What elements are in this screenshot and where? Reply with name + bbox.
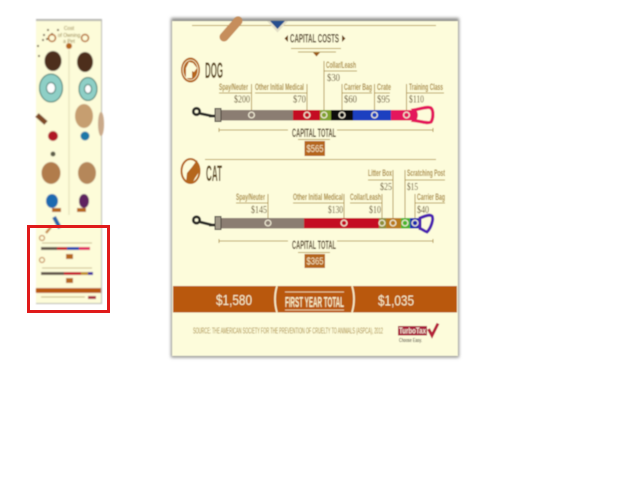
label: training class: Training Class: [409, 82, 443, 93]
label: carrier bag: [415, 192, 445, 218]
label: spay/neuter: Spay/Neuter: [219, 82, 248, 93]
label: collar/leash: $10: [369, 205, 381, 216]
logo: turbotax: [398, 324, 438, 344]
label: collar/leash: $30: [327, 73, 340, 84]
main panel shadow: [171, 18, 459, 358]
label: spay/neuter: $200: [234, 94, 250, 106]
thumbnail: title: [58, 26, 80, 45]
thumbnail highlight frame: [28, 226, 108, 312]
thumbnail: title: Cost: [64, 26, 75, 32]
thumbnail: mini dog leash: [40, 236, 92, 259]
icon: dog: [181, 58, 200, 82]
thumbnail: pet icons: [48, 34, 88, 42]
label: other initial medical: [293, 192, 344, 218]
label: collar/leash: Collar/Leash: [350, 192, 381, 203]
section: dog: [181, 58, 444, 156]
section: dog: DOG: [205, 58, 223, 83]
first year total band: [173, 286, 457, 312]
divider: [205, 158, 436, 160]
thumbnail: food bowls: [44, 51, 93, 72]
thumbnail: full infographic overview: [36, 19, 104, 304]
total: dog: [219, 128, 433, 156]
label: collar/leash: Collar/Leash: [326, 60, 356, 71]
label: spay/neuter: [219, 82, 252, 110]
cat first year value: $1,035: [378, 292, 414, 310]
leash: dog: [193, 107, 433, 123]
total: cat: [219, 239, 433, 268]
label: scratching post: Scratching Post: [407, 168, 445, 179]
label: crate: $95: [377, 94, 390, 106]
heading: capital costs: CAPITAL COSTS: [290, 34, 339, 46]
label: carrier bag: Carrier Bag: [417, 192, 445, 203]
thumbnail: centre spine: [68, 50, 70, 215]
label: other initial medical: [255, 82, 307, 110]
label: collar/leash: [324, 60, 357, 110]
main panel: [172, 21, 458, 356]
thumbnail: water bowls: [40, 74, 97, 102]
section: cat: [182, 159, 445, 268]
heading: capital costs: [284, 34, 346, 56]
thumbnail: title: of Owning: [58, 33, 80, 39]
bone illustration: [224, 21, 238, 37]
first year total band: FIRST YEAR TOTAL: [285, 294, 344, 311]
thumbnail: treats and toys: [37, 104, 104, 156]
label: spay/neuter: Spay/Neuter: [236, 192, 265, 203]
band label: [275, 286, 354, 312]
label: scratching post: [405, 168, 445, 218]
thumbnail: kibble scatter: [37, 29, 59, 57]
label: collar/leash: [350, 192, 382, 218]
total: dog: $565: [306, 144, 324, 155]
label: spay/neuter: $145: [251, 205, 267, 216]
total: cat: $365: [306, 256, 324, 268]
thumbnail: mini source: [41, 296, 85, 298]
label: other initial medical: Other Initial Medical: [293, 192, 343, 203]
dog first year value: $1,580: [216, 292, 252, 309]
rivets: [265, 220, 271, 226]
thumbnail: grooming and bags: [42, 162, 96, 233]
label: crate: [374, 82, 391, 110]
label: training class: [406, 82, 444, 110]
label: carrier bag: $60: [344, 94, 357, 106]
leash: cat: [193, 215, 433, 232]
total: cat: CAPITAL TOTAL: [292, 240, 336, 252]
label: spay/neuter: [236, 192, 268, 218]
leash clip: [193, 217, 216, 225]
thumbnail: title: a Pet: [63, 39, 75, 45]
leash handle: [414, 107, 433, 123]
header rule: [192, 24, 436, 26]
leash clip: [193, 108, 216, 116]
icon: cat: [182, 159, 200, 183]
label: carrier bag: $40: [417, 205, 429, 216]
rivets: [249, 112, 254, 118]
leash handle: [420, 215, 433, 232]
label: carrier bag: [342, 82, 372, 110]
logo: turbotax: Choose Easy.: [399, 338, 422, 344]
thumbnail: mini cat leash: [40, 258, 93, 283]
logo: turbotax: TurboTax: [399, 326, 426, 336]
label: other initial medical: $130: [328, 205, 343, 216]
label: litter box: $25: [380, 182, 392, 193]
thumbnail: mini total bar: [36, 288, 101, 293]
label: other initial medical: Other Initial Medical: [255, 82, 304, 93]
label: scratching post: $15: [407, 182, 418, 193]
label: other initial medical: $70: [293, 94, 306, 106]
label: crate: Crate: [377, 82, 391, 93]
label: litter box: Litter Box: [368, 168, 392, 179]
label: carrier bag: Carrier Bag: [344, 82, 372, 93]
label: litter box: [368, 168, 393, 218]
section: cat: CAT: [206, 161, 222, 186]
label: training class: $110: [409, 94, 424, 106]
text: SOURCE: THE AMERICAN SOCIETY FOR THE PREVENTION OF CRUELTY TO ANIMALS (ASPCA), 2012: [193, 326, 383, 336]
total: dog: CAPITAL TOTAL: [292, 128, 336, 140]
tag illustration: [267, 21, 288, 32]
